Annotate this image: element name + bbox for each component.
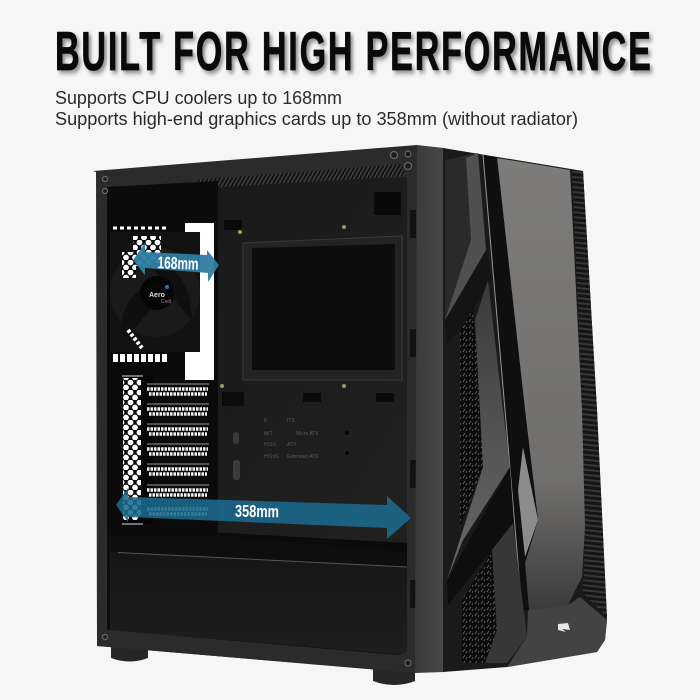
bright wedge [518, 447, 538, 557]
expansion slots [147, 384, 209, 514]
motherboard size labels: ATX [287, 442, 297, 448]
motherboard size labels: H/SG [264, 442, 276, 448]
lower grey panel [485, 523, 527, 663]
arrow: 358mm graphics card clearance [116, 488, 411, 539]
front panel edge strip [415, 145, 444, 673]
motherboard size labels: Extended ATX [287, 454, 319, 460]
motherboard size labels: H/SxG [264, 454, 279, 460]
subtitle text block [55, 87, 578, 129]
subtitle text block: Supports CPU coolers up to 168mm [55, 87, 342, 108]
upper angular trim [445, 153, 522, 610]
title: BUILT FOR HIGH PERFORMANCE [55, 21, 651, 82]
black band [483, 155, 538, 610]
perforation row bottom [113, 354, 168, 362]
motherboard size labels: M/T [264, 431, 273, 437]
front logo [558, 623, 570, 632]
PSU shroud [107, 535, 407, 660]
upper mesh [460, 310, 483, 527]
motherboard size labels: K [264, 418, 268, 424]
bottom frame rail [97, 630, 415, 673]
fan logo: Cool [161, 299, 171, 305]
front panel base [443, 148, 607, 672]
motherboard size labels [264, 418, 319, 460]
right mesh strip [572, 171, 607, 617]
arrow: 168mm CPU cooler clearance: 168mm [157, 253, 199, 274]
fan logo: Aero [149, 292, 165, 299]
lower tray bar [190, 532, 407, 553]
case feet [111, 645, 415, 685]
motherboard size labels: ITX [287, 418, 295, 424]
subtitle text block: Supports high-end graphics cards up to 358mm (without radiator) [55, 108, 578, 129]
corner screws [102, 151, 412, 666]
tray details [220, 192, 401, 480]
lower mesh [462, 550, 497, 663]
side frame slots [410, 210, 416, 608]
interior tray [107, 177, 407, 660]
PC case illustration [93, 145, 607, 685]
perforation row top [113, 226, 168, 230]
glossy grey front panel [497, 158, 585, 610]
motherboard size labels: Micro ATX [296, 431, 319, 437]
expansion slots column [122, 376, 153, 524]
white rear cutout [185, 223, 214, 380]
cooling fan [110, 232, 200, 352]
dark shard [447, 467, 514, 605]
front panel bottom base [507, 597, 607, 667]
side frame [93, 145, 417, 673]
CPU cutout [243, 236, 402, 380]
arrow: 168mm CPU cooler clearance [133, 243, 219, 282]
fan logo [149, 285, 171, 305]
grey side panel [447, 280, 510, 580]
top vent [195, 164, 406, 188]
arrow: 358mm graphics card clearance: 358mm [235, 502, 279, 521]
rear dark section [107, 181, 218, 535]
